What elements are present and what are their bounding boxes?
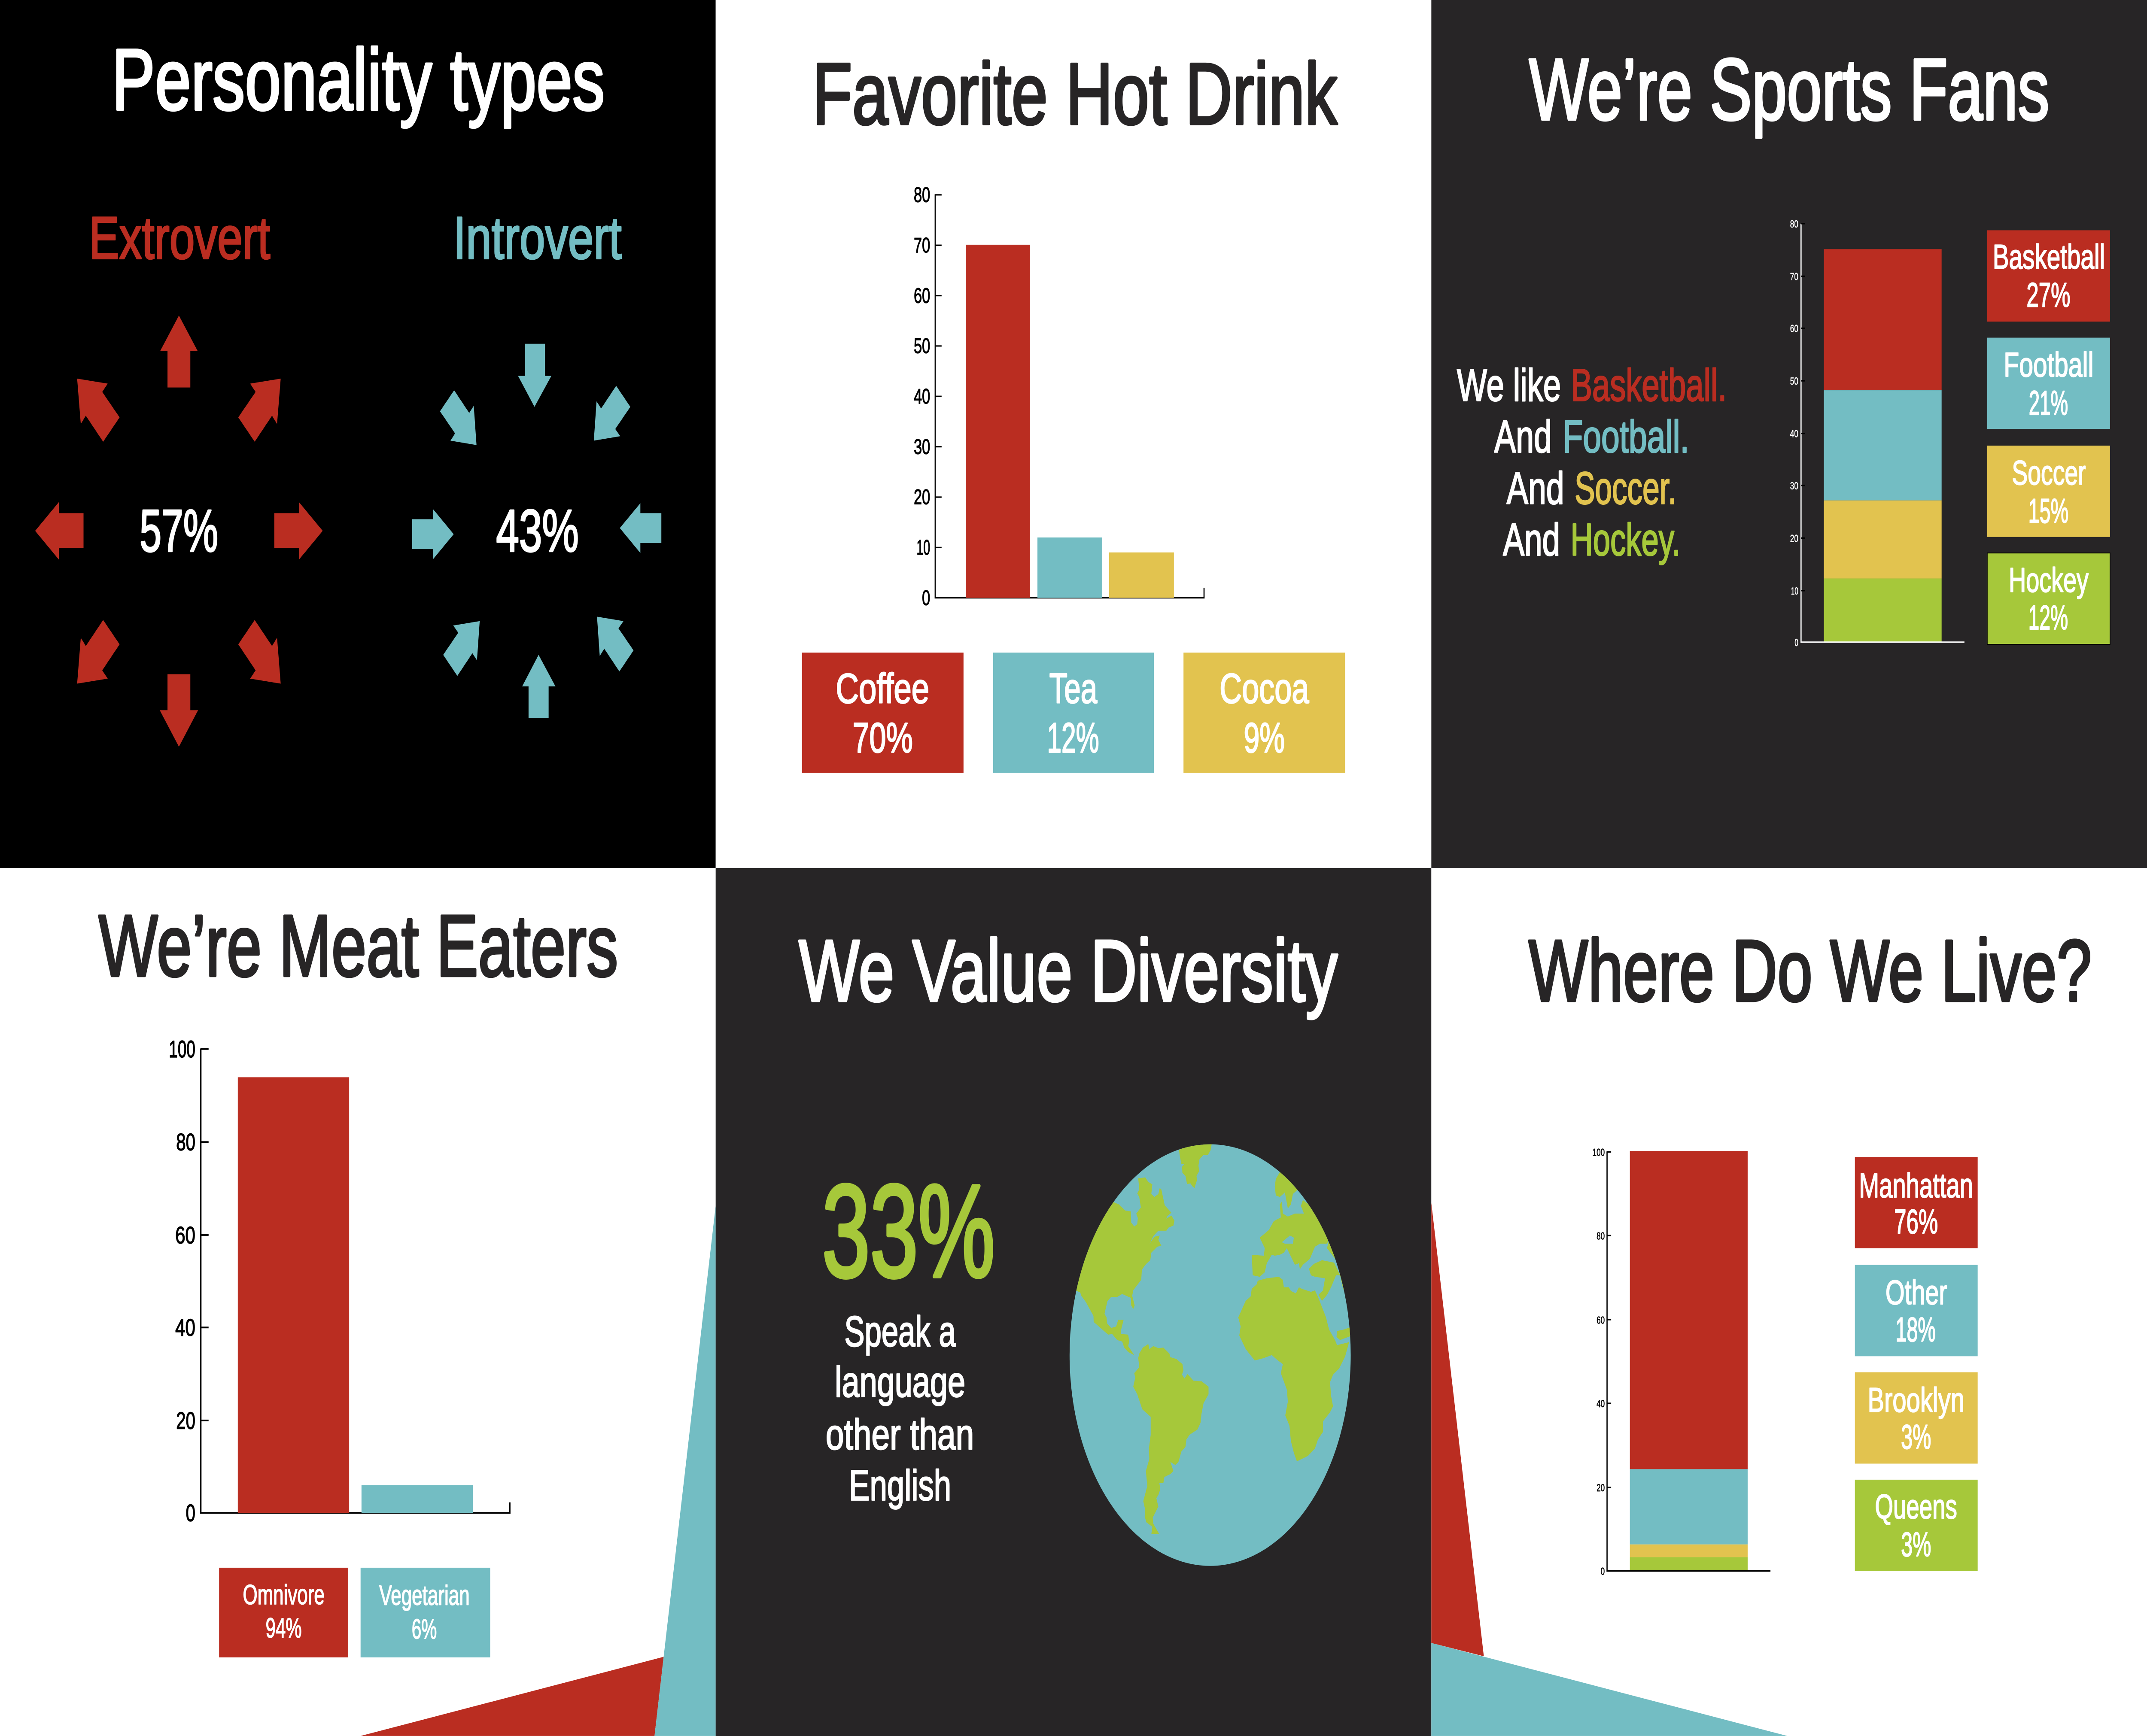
- title: favorite hot drink: Favorite Hot Drink: [812, 45, 1338, 143]
- bar chart: hot drinks: 50: [914, 334, 930, 358]
- panel: sports fans: [1431, 0, 2147, 868]
- heading: introvert: Introvert: [453, 205, 622, 272]
- bar chart: hot drinks: 60: [914, 284, 930, 307]
- stacked bar chart: location: 60: [1597, 1314, 1605, 1326]
- legend: soccer: [1987, 446, 2110, 537]
- text group: diversity stat: language: [835, 1358, 965, 1406]
- legend: omnivore: [219, 1568, 348, 1657]
- legend: coffee: Coffee: [836, 665, 929, 712]
- stacked bar chart: location: 100: [1593, 1147, 1605, 1158]
- text block: we like sports: And: [1507, 462, 1564, 513]
- legend: coffee: 70%: [853, 715, 913, 762]
- legend: vegetarian: [361, 1568, 490, 1657]
- legend: tea: [993, 653, 1154, 773]
- legend: queens: Queens: [1875, 1487, 1957, 1526]
- stacked bar chart: location: 0: [1601, 1566, 1605, 1577]
- text group: diversity stat: 33%: [822, 1157, 995, 1305]
- title: personality types: Personality types: [112, 31, 605, 128]
- bar chart: diet: 80: [176, 1129, 195, 1156]
- text group: diversity stat: We Value Diversity: [799, 922, 1338, 1020]
- decoration: teal wedge: [654, 1206, 716, 1736]
- text block: we like sports: And: [1494, 411, 1552, 462]
- panel: meat eaters: [0, 868, 716, 1736]
- stat: 43 percent: 43%: [496, 498, 579, 565]
- legend: tea: 12%: [1047, 715, 1099, 762]
- title: we're meat eaters: We’re Meat Eaters: [99, 897, 618, 995]
- text block: we like sports: Football.: [1563, 411, 1689, 462]
- stacked bar chart: sports: 40: [1790, 428, 1798, 440]
- legend: football: Football: [2004, 346, 2094, 384]
- decoration: teal wedge: [1431, 1643, 1787, 1736]
- bar chart: hot drinks: [914, 183, 1204, 610]
- text block: we like sports: Soccer.: [1575, 462, 1676, 513]
- stacked bar chart: sports: 60: [1790, 323, 1798, 334]
- bar chart: diet: 0: [186, 1499, 195, 1527]
- legend: vegetarian: 6%: [412, 1614, 437, 1645]
- legend: basketball: 27%: [2026, 276, 2070, 314]
- legend: brooklyn: Brooklyn: [1867, 1381, 1965, 1419]
- stacked bar chart: sports: 10: [1791, 585, 1798, 597]
- bar chart: hot drinks: 70: [914, 233, 930, 257]
- bar chart: hot drinks: 30: [914, 435, 930, 458]
- bar chart: diet: [169, 1036, 510, 1527]
- decoration: red wedge: [361, 1657, 664, 1736]
- legend: hockey: 12%: [2028, 598, 2068, 637]
- text block: we like sports: Basketball.: [1571, 360, 1727, 411]
- bar chart: diet: 60: [175, 1222, 195, 1248]
- text group: diversity stat: [799, 922, 1338, 1509]
- legend: brooklyn: 3%: [1901, 1418, 1931, 1456]
- legend: soccer: Soccer: [2012, 453, 2086, 492]
- stacked bar chart: sports: 70: [1790, 271, 1798, 282]
- text block: we like sports: [1457, 360, 1727, 565]
- legend: omnivore: Omnivore: [243, 1579, 325, 1610]
- bar chart: diet: 20: [176, 1407, 195, 1434]
- stacked bar chart: sports: 30: [1790, 480, 1798, 492]
- legend: basketball: Basketball: [1993, 237, 2105, 276]
- legend: manhattan: 76%: [1894, 1202, 1938, 1241]
- stacked bar chart: location: 20: [1597, 1482, 1605, 1493]
- stat: 57 percent: 57%: [140, 498, 218, 565]
- stacked bar chart: location: 80: [1597, 1230, 1605, 1242]
- legend: soccer: 15%: [2028, 492, 2068, 530]
- bar chart: diet: 40: [175, 1314, 195, 1341]
- icon: globe: [1065, 1140, 1352, 1566]
- icon: inward teal arrows: [412, 344, 661, 718]
- stacked bar chart: sports: 50: [1790, 375, 1798, 387]
- legend: manhattan: Manhattan: [1859, 1166, 1973, 1205]
- panel: favorite hot drink: [716, 0, 1431, 868]
- legend: vegetarian: Vegetarian: [379, 1580, 470, 1611]
- title: we're sports fans: We’re Sports Fans: [1529, 40, 2050, 138]
- legend: cocoa: 9%: [1244, 715, 1285, 762]
- panel: personality types: [0, 0, 716, 868]
- text group: diversity stat: other than: [826, 1410, 974, 1459]
- stacked bar chart: sports: 0: [1794, 637, 1798, 648]
- bar chart: hot drinks: 10: [916, 535, 930, 559]
- legend: other: [1855, 1265, 1978, 1356]
- bar chart: hot drinks: 0: [922, 586, 930, 610]
- bar chart: hot drinks: 80: [914, 183, 930, 207]
- stacked bar chart: sports: [1790, 218, 1965, 648]
- stacked bar chart: sports: 80: [1790, 218, 1798, 230]
- legend: other: 18%: [1895, 1310, 1936, 1349]
- text block: we like sports: We like: [1457, 360, 1561, 411]
- decoration: red wedge: [1431, 1203, 1484, 1656]
- legend: hockey: Hockey: [2009, 561, 2089, 599]
- text group: diversity stat: English: [849, 1461, 951, 1509]
- text block: we like sports: And: [1503, 514, 1560, 565]
- stacked bar chart: location: 40: [1597, 1398, 1605, 1409]
- legend: other: Other: [1885, 1273, 1947, 1312]
- panel: where do we live: [1431, 868, 2147, 1736]
- legend: queens: [1855, 1480, 1978, 1571]
- legend: cocoa: [1183, 653, 1345, 773]
- stacked bar chart: location: [1593, 1147, 1770, 1577]
- legend: cocoa: Cocoa: [1219, 665, 1309, 712]
- heading: extrovert: Extrovert: [89, 205, 270, 272]
- icon: outward red arrows: [35, 316, 322, 747]
- legend: brooklyn: [1855, 1372, 1978, 1464]
- legend: coffee: [802, 653, 964, 773]
- legend: football: [1987, 338, 2110, 429]
- legend: tea: Tea: [1049, 665, 1097, 712]
- legend: basketball: [1987, 230, 2110, 322]
- bar chart: diet: 100: [169, 1036, 195, 1062]
- legend: omnivore: 94%: [266, 1613, 302, 1644]
- legend: football: 21%: [2029, 384, 2068, 422]
- legend: manhattan: [1855, 1157, 1978, 1248]
- text block: we like sports: Hockey.: [1571, 514, 1681, 565]
- text group: diversity stat: Speak a: [844, 1308, 956, 1356]
- legend: queens: 3%: [1901, 1525, 1931, 1563]
- stacked bar chart: sports: 20: [1790, 533, 1798, 544]
- bar chart: hot drinks: 20: [914, 485, 930, 509]
- legend: hockey: [1987, 553, 2110, 644]
- bar chart: hot drinks: 40: [914, 384, 930, 408]
- panel: we value diversity: [716, 868, 1431, 1736]
